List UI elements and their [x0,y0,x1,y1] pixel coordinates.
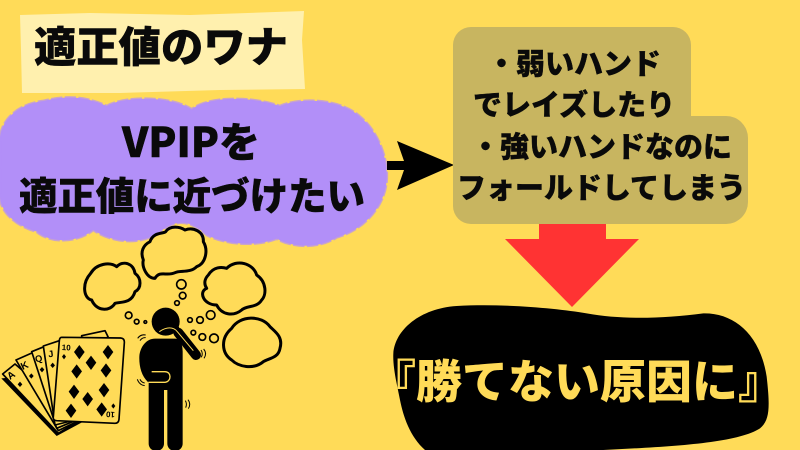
panel: hand mistakes: でレイズしたり [473,82,675,124]
icon: thinking person with clouds [1,227,281,450]
panel: purple brushed cloud: 適正値に近づけたい [19,166,365,222]
callout: black blob [370,305,784,450]
callout: black blob: 『勝てない原因に』 [370,346,784,412]
icon: playing cards [1,331,124,436]
icon: thinking person with clouds: 10 [62,343,71,352]
icon: thinking person with clouds: 10 [105,410,115,419]
icon: thought bubbles [125,280,218,343]
panel: hand mistakes: ・強いハンドなのに [471,124,732,166]
title: 適正値のワナ [34,14,288,75]
arrow: black right [387,141,454,190]
panel: hand mistakes: ・弱いハンド [487,41,661,83]
icon: thinking person with clouds: K [19,359,31,373]
icon: thinking person with clouds: J [48,349,54,359]
arrow: red down [505,224,639,307]
panel: hand mistakes: フォールドしてしまう [457,165,746,207]
panel: hand mistakes [453,27,748,224]
icon: person silhouette [137,308,206,450]
panel: purple brushed cloud [0,97,387,246]
icon: thought clouds [85,227,281,367]
icon: thinking person with clouds: A [5,369,18,382]
icon: thinking person with clouds: Q [34,353,44,365]
title [20,11,305,93]
panel: purple brushed cloud: VPIPを [121,109,260,169]
